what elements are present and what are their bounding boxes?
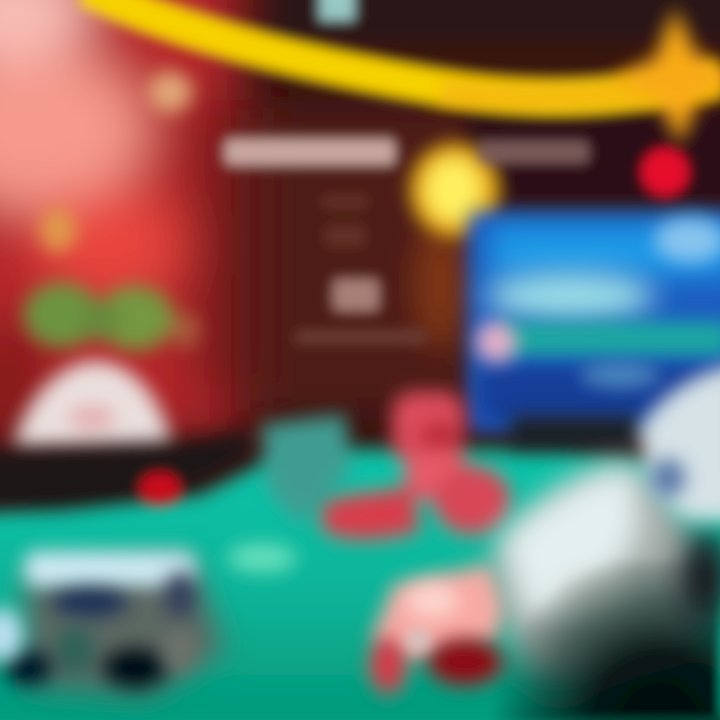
icon: yellow coin <box>411 144 499 236</box>
panel: blue water picture <box>468 212 720 451</box>
icon: faint green highlight on felt <box>228 544 296 572</box>
background: dark maroon wall <box>0 0 720 560</box>
icon: pink block <box>370 565 503 693</box>
icon: green cushion <box>24 283 199 350</box>
background: green felt table <box>0 450 720 720</box>
text block: blurred heading <box>224 138 590 344</box>
icon: small red chip <box>138 471 182 505</box>
icon: small teal mark top <box>318 0 356 22</box>
icon: yellow curved ribbon <box>85 0 720 99</box>
icon: small tan glow top <box>148 72 192 112</box>
icon: dark dice stack <box>4 552 225 695</box>
icon: white dome <box>14 362 172 448</box>
icon: white ball upper right <box>640 365 720 520</box>
background: bottom felt base <box>0 560 720 720</box>
icon: red dot upper right <box>640 147 690 197</box>
icon: orange star <box>610 8 720 145</box>
icon: red spinner shape <box>322 392 510 539</box>
icon: large white ball <box>480 467 720 720</box>
background: dark bottom right base <box>480 550 720 720</box>
panel: red glow at left <box>0 0 250 450</box>
panel: dark table edge <box>0 430 250 508</box>
icon: small glow above cushion <box>40 208 76 252</box>
icon: teal block <box>262 415 350 525</box>
icon: pale chip at left edge <box>0 609 22 661</box>
